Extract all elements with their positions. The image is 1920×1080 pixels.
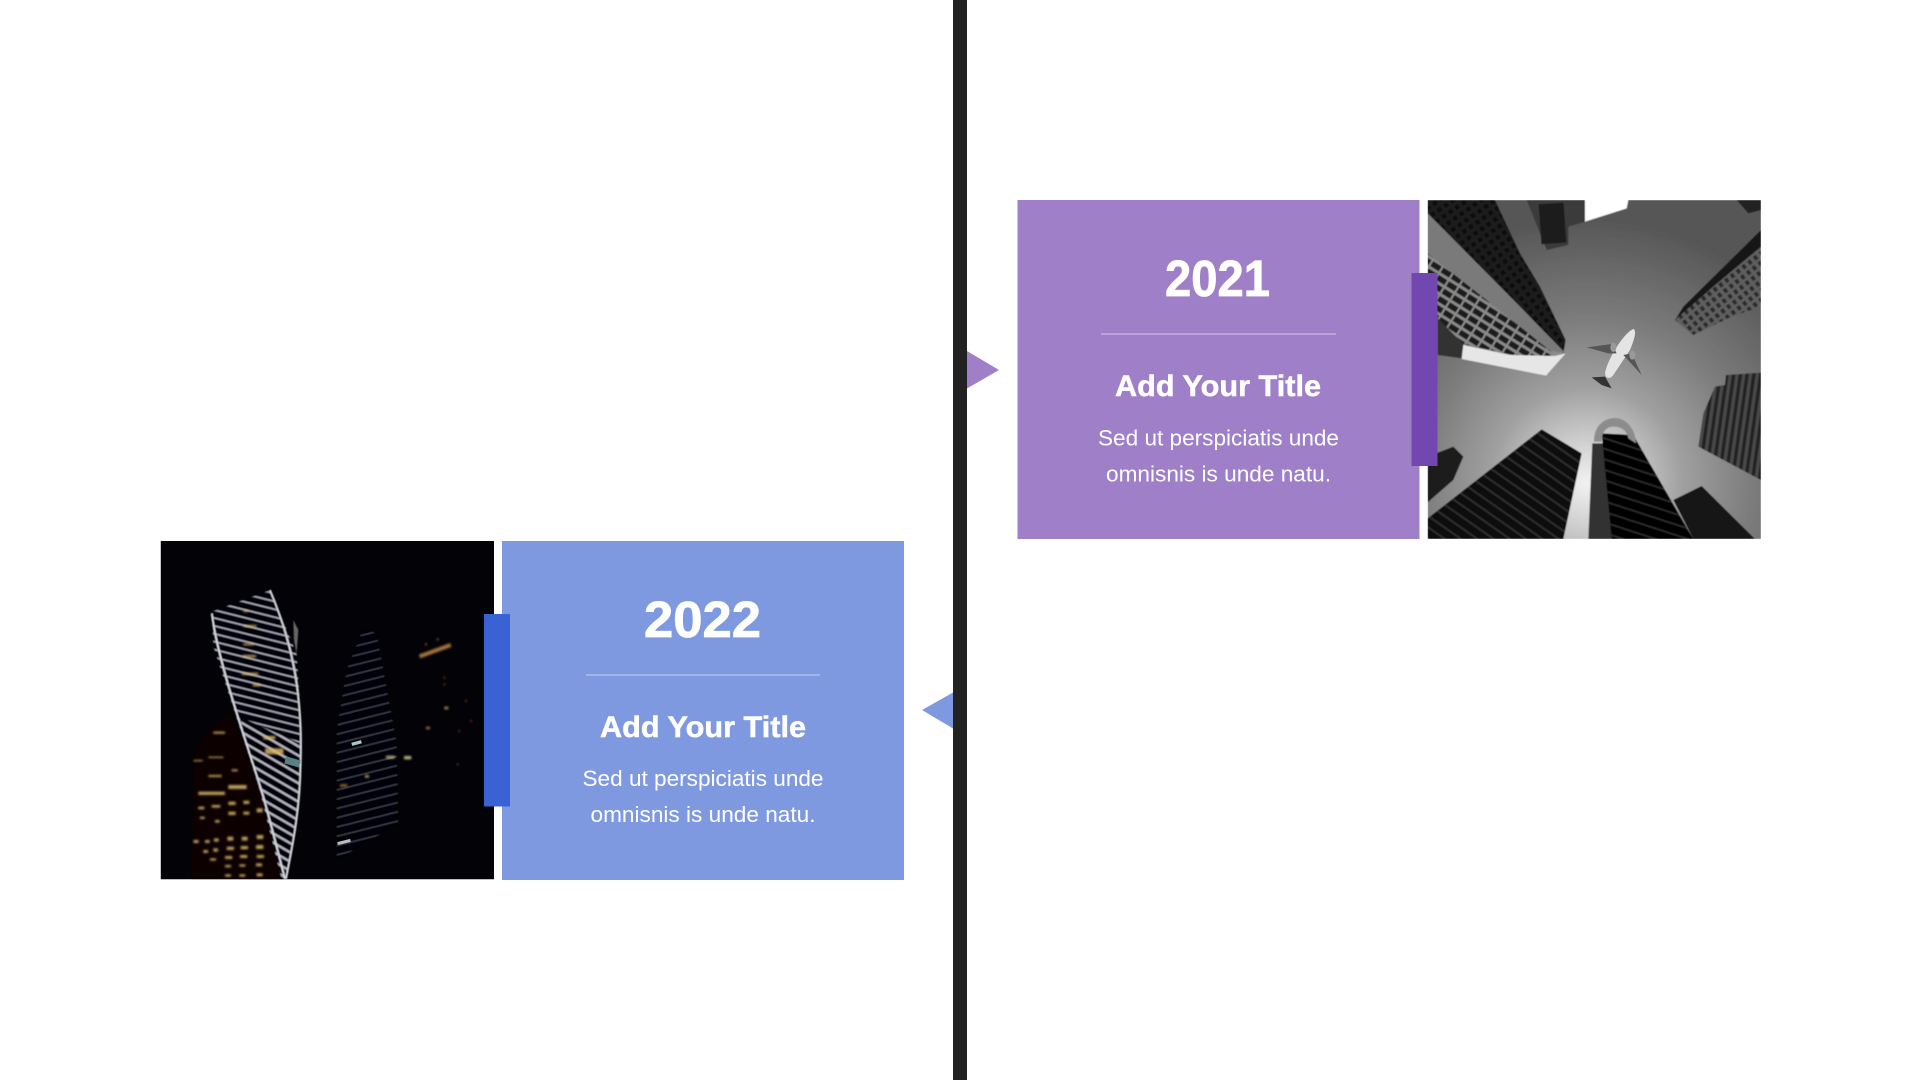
card body text <box>1098 426 1339 486</box>
divider <box>586 674 820 676</box>
photo: skyscrapers and airplane <box>1428 200 1761 539</box>
accent tab <box>1412 273 1438 466</box>
timeline vertical bar <box>953 0 967 1080</box>
arrow: pointer to timeline <box>922 692 953 728</box>
photo: twisted tower at night <box>161 541 494 879</box>
purple card <box>1018 200 1420 539</box>
card body text: Sed ut perspiciatis unde <box>1098 426 1339 450</box>
icon: airplane <box>1587 329 1642 388</box>
arrow: pointer to timeline <box>967 351 999 388</box>
card body text: omnisnis is unde natu. <box>1106 462 1331 486</box>
year 2021: 2021 <box>1165 250 1270 307</box>
card body text <box>582 766 824 827</box>
divider <box>1101 334 1336 335</box>
accent tab <box>484 614 510 806</box>
window lights <box>193 610 472 877</box>
card title: Add Your Title <box>600 711 806 744</box>
panel: 2022 milestone <box>161 541 953 880</box>
blue card <box>502 541 904 880</box>
card body text: Sed ut perspiciatis unde <box>582 766 824 791</box>
year 2022: 2022 <box>644 591 761 648</box>
panel: 2021 milestone <box>967 200 1761 539</box>
card body text: omnisnis is unde natu. <box>590 802 816 827</box>
card title: Add Your Title <box>1115 370 1321 403</box>
